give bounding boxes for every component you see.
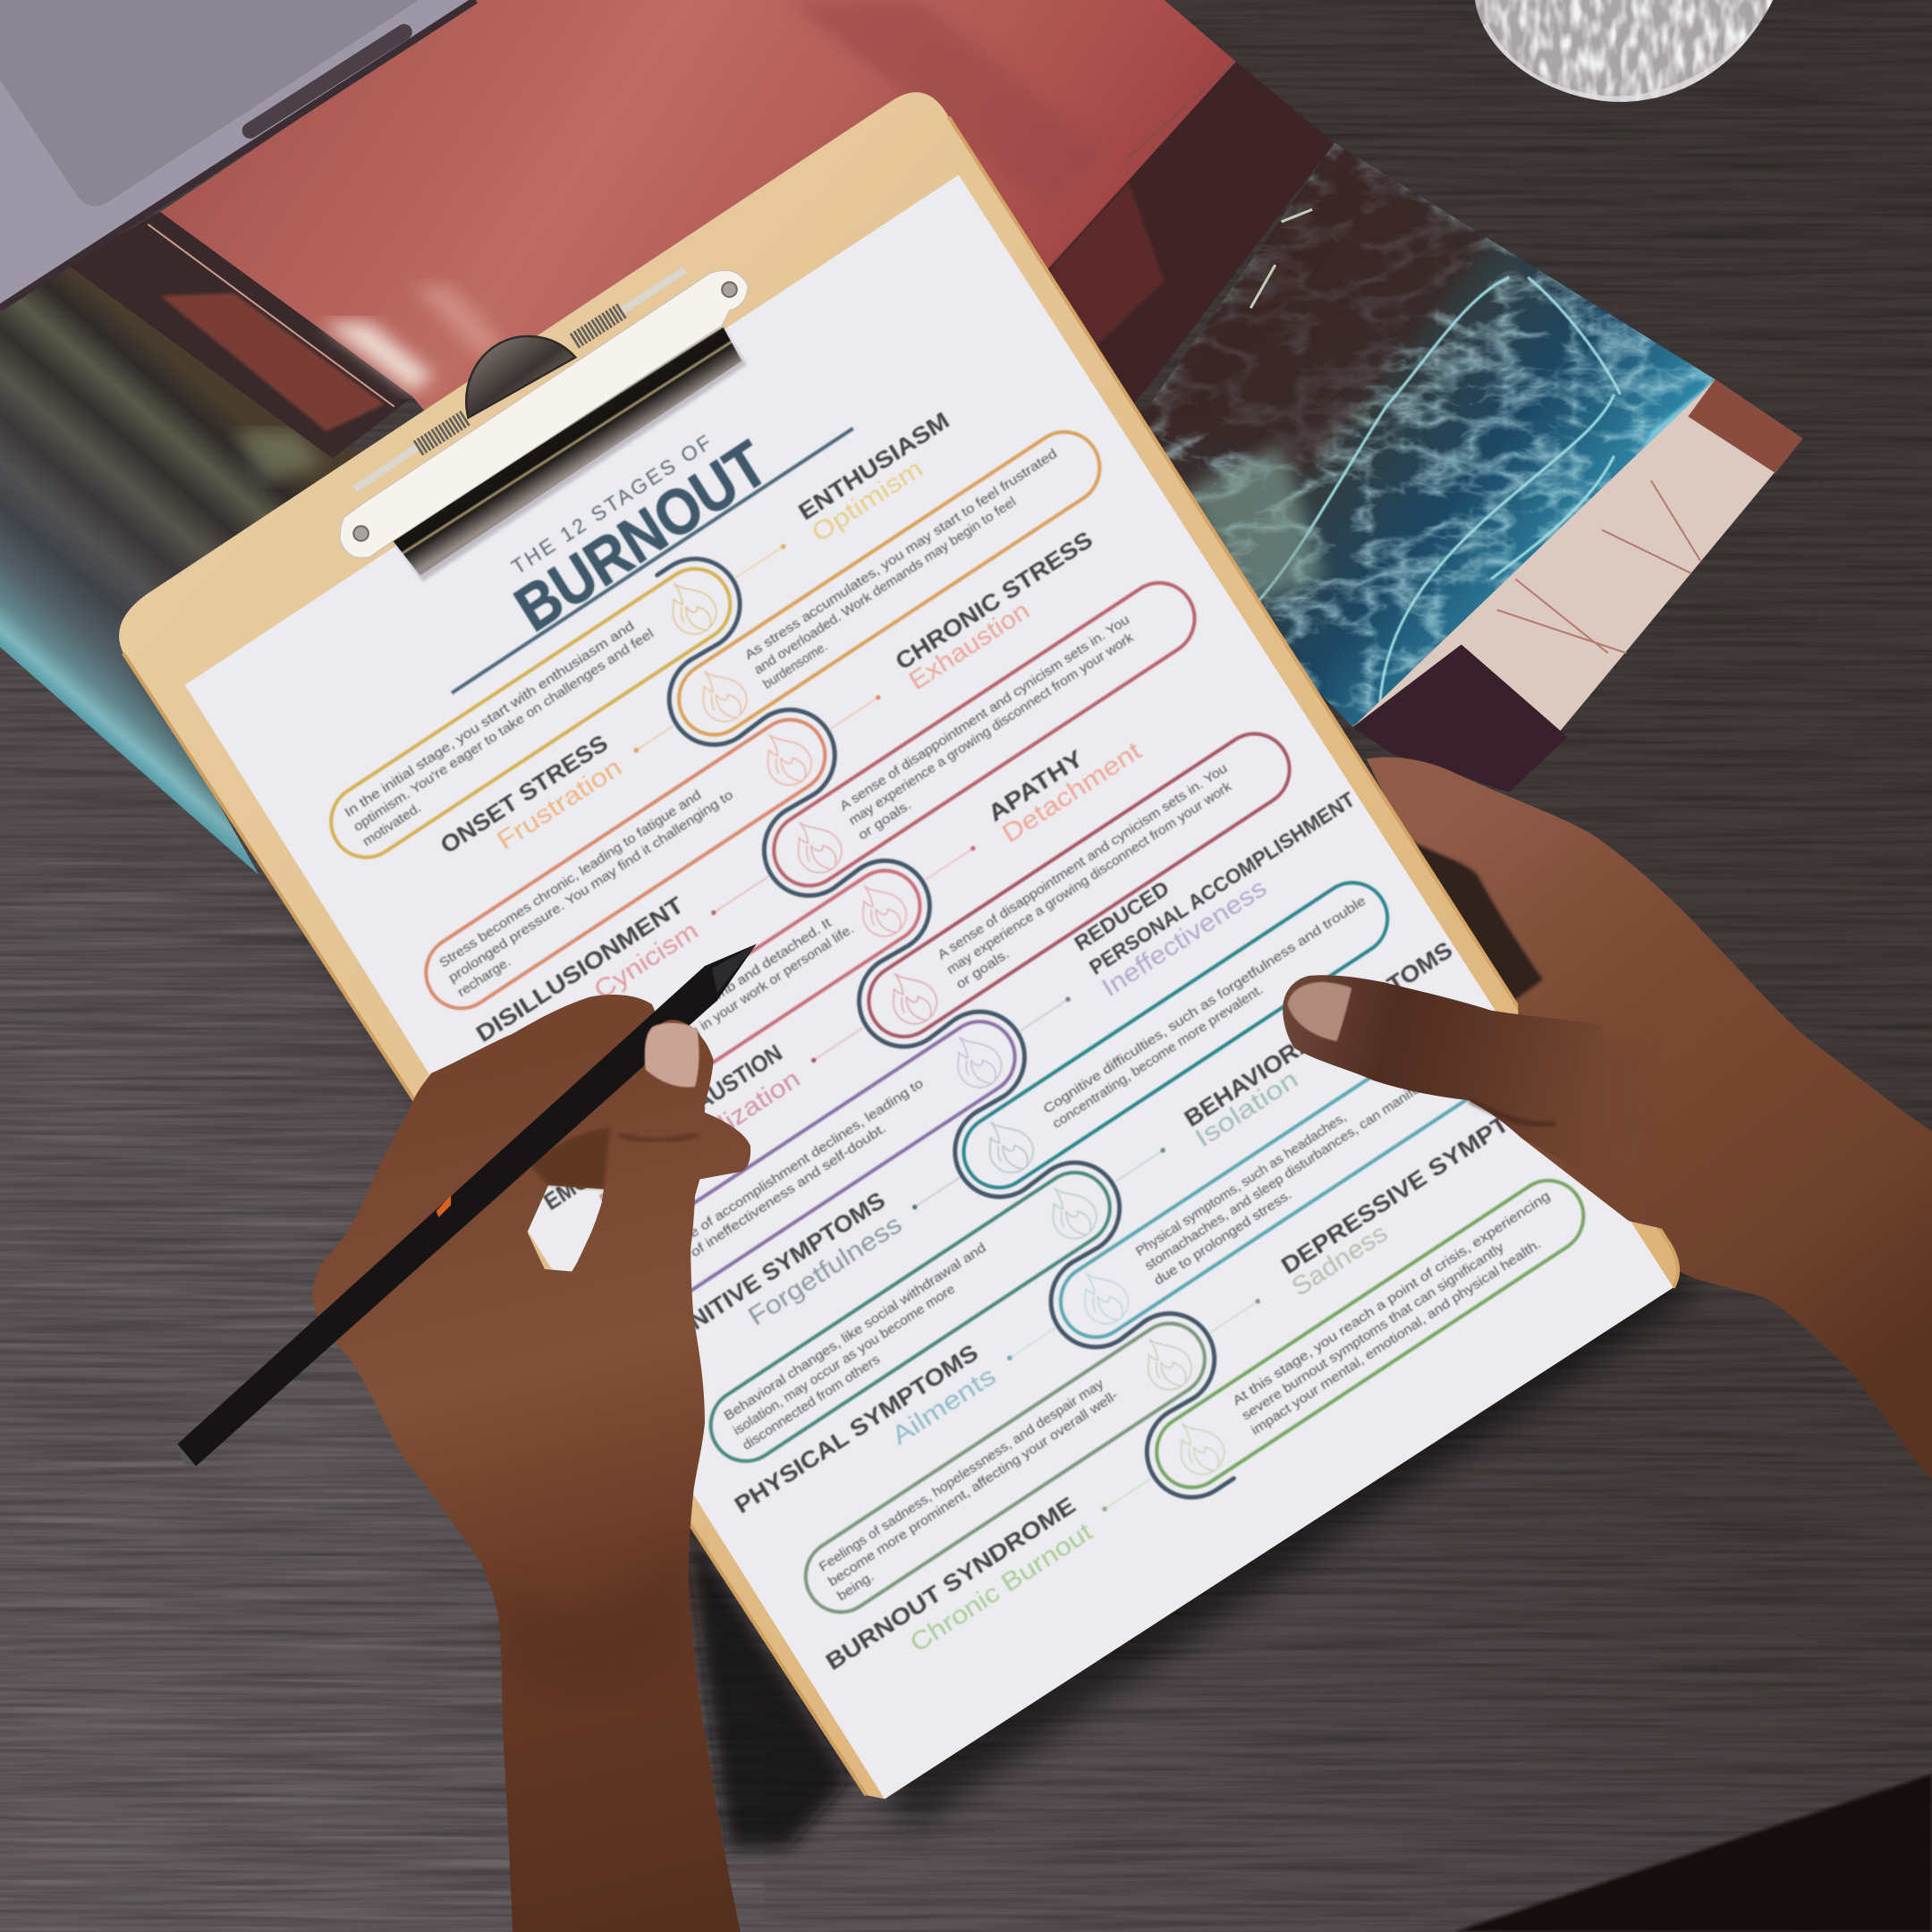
label xyxy=(983,716,1147,850)
flame icon xyxy=(1133,1326,1199,1398)
pill xyxy=(603,1008,1029,1324)
clip chrome lip xyxy=(393,326,741,575)
serpentine connector line xyxy=(605,541,1279,1517)
magazine back sheet xyxy=(1353,379,1802,792)
stage 8 xyxy=(637,866,1401,1407)
pill xyxy=(665,418,1113,749)
stage 6 xyxy=(539,716,1303,1258)
right hand palm over clipboard xyxy=(1518,1004,1750,1282)
description xyxy=(1133,1062,1442,1289)
left hand wrist shading xyxy=(499,1540,690,1694)
label: Frustration xyxy=(492,753,627,856)
description xyxy=(343,612,665,850)
connector xyxy=(1209,1298,1261,1335)
left hand xyxy=(313,995,750,1932)
pencil xyxy=(177,944,757,1466)
flame icon xyxy=(943,1024,1009,1096)
left hand fingers shadow xyxy=(530,1127,610,1189)
description: Cognitive difficulties, such as forgetfulness and trouble xyxy=(1041,894,1368,1117)
connector xyxy=(633,724,674,754)
label xyxy=(891,526,1111,697)
laptop xyxy=(0,0,476,308)
description: or goals. xyxy=(953,947,1012,992)
thumb to palm blend xyxy=(1583,1032,1651,1189)
description: severe burnout symptoms that can significantly xyxy=(1240,1240,1507,1424)
description: concentrating, become more prevalent. xyxy=(1050,983,1266,1131)
description: As stress accumulates, you may start to feel frustrated xyxy=(742,447,1060,663)
description: disconnected from others xyxy=(741,1352,883,1453)
description: Feelings of sadness, hopelessness, and despair may xyxy=(817,1377,1107,1575)
stage 9 xyxy=(698,927,1475,1475)
flame icon xyxy=(753,722,818,793)
description: or goals. xyxy=(856,798,914,843)
stage 7 xyxy=(594,763,1378,1324)
label: Chronic Burnout xyxy=(905,1518,1097,1658)
label: ONSET STRESS xyxy=(436,729,613,859)
flame icon xyxy=(975,1109,1041,1182)
stage 1 xyxy=(318,402,975,871)
paper sheet xyxy=(185,175,1674,1799)
description: being. xyxy=(835,1570,877,1604)
pill xyxy=(760,569,1208,900)
description: due to prolonged stress. xyxy=(1152,1188,1294,1289)
pill xyxy=(318,555,743,871)
connector xyxy=(911,1175,962,1210)
magazine blue marble photo xyxy=(1142,143,1716,726)
clip shadow xyxy=(393,326,747,581)
description: A sense of disappointment and cynicism sets in. You xyxy=(837,613,1132,814)
label: Ailments xyxy=(887,1361,1001,1451)
magazine red page xyxy=(160,0,1236,493)
description xyxy=(936,761,1249,992)
label xyxy=(793,406,968,548)
stage 11 xyxy=(792,1070,1582,1626)
description: Your sense of accomplishment declines, leading to xyxy=(631,1076,926,1278)
description: optimism. You're eager to take on challenges and feel xyxy=(352,627,657,835)
connector xyxy=(829,694,882,731)
label: Depersonalization xyxy=(595,1064,805,1217)
label: REDUCED xyxy=(1070,876,1173,955)
description: Stress becomes chronic, leading to fatigue and xyxy=(437,788,704,971)
clipboard xyxy=(119,92,1678,1799)
description: feelings of ineffectiveness and self-doubt. xyxy=(640,1122,889,1292)
magazine dark beam xyxy=(68,212,412,458)
flame icon xyxy=(688,658,754,730)
infographic on paper xyxy=(243,225,1635,1722)
right hand finger crease xyxy=(1404,838,1543,1004)
flame icon xyxy=(878,961,945,1032)
description xyxy=(1231,1190,1572,1438)
connector xyxy=(734,543,786,580)
left thumb xyxy=(572,1020,714,1331)
connector xyxy=(1101,1477,1151,1513)
description: impact your mental, emotional, and physical health. xyxy=(1249,1237,1544,1438)
clip rivets xyxy=(353,282,737,541)
description: burdensome. xyxy=(761,640,830,692)
label: BEHAVIORAL SYMPTOMS xyxy=(1180,936,1457,1132)
laptop notch xyxy=(250,32,404,131)
label: Cynicism xyxy=(589,916,703,1005)
pill xyxy=(792,1309,1218,1626)
thumb nail xyxy=(645,1023,699,1088)
description: become more prominent, affecting your overall well- xyxy=(826,1388,1121,1589)
label: CHRONIC STRESS xyxy=(891,526,1097,675)
connector xyxy=(1020,996,1072,1033)
description: may be hard to find meaning in your work or personal life. xyxy=(541,922,857,1137)
description: and overloaded. Work demands may begin to feel xyxy=(752,495,1019,678)
title rule xyxy=(452,428,853,693)
description xyxy=(722,1241,1007,1453)
magazine pale highlight xyxy=(323,323,434,392)
label: COGNITIVE SYMPTOMS xyxy=(637,1186,890,1366)
clip dome xyxy=(466,336,575,418)
clip white plate xyxy=(340,270,748,558)
label: PHYSICAL SYMPTOMS xyxy=(730,1339,983,1519)
metal clip xyxy=(340,270,748,581)
clipboard shadow xyxy=(148,123,1694,1830)
pill xyxy=(855,720,1303,1050)
label xyxy=(730,1337,1001,1545)
magazine striped photo xyxy=(0,265,369,875)
stage 4 xyxy=(471,565,1208,1089)
flame icon xyxy=(848,873,914,945)
flame icon xyxy=(657,571,724,642)
description xyxy=(742,447,1079,692)
title kicker: THE 12 STAGES OF xyxy=(507,430,716,579)
label xyxy=(471,891,705,1073)
label: Sadness xyxy=(1287,1218,1393,1302)
label: Forgetfulness xyxy=(743,1209,907,1332)
description xyxy=(631,1076,936,1292)
connector xyxy=(924,845,977,882)
thumb knuckle shading xyxy=(620,1133,698,1141)
right thumb nail xyxy=(1288,982,1352,1041)
pill xyxy=(412,706,838,1022)
label: APATHY xyxy=(983,744,1089,826)
stage 5 xyxy=(507,712,1154,1173)
label: Isolation xyxy=(1191,1065,1303,1154)
label xyxy=(1275,1077,1577,1302)
description: may experience a growing disconnect from your work xyxy=(847,631,1137,828)
label: EMOTIONAL EXHAUSTION xyxy=(539,1038,787,1216)
description: In the initial stage, you start with enthusiasm and xyxy=(343,619,637,820)
label: DEPRESSIVE SYMPTOMS xyxy=(1276,1077,1563,1279)
flame icon xyxy=(1165,1411,1232,1483)
label: BURNOUT SYNDROME xyxy=(821,1491,1080,1675)
connector xyxy=(710,875,769,916)
label: Optimism xyxy=(807,454,928,548)
pill xyxy=(1143,1166,1597,1501)
description: may experience a growing disconnect from your work xyxy=(945,779,1235,978)
description: isolation, may occur as you become more xyxy=(731,1282,958,1438)
clip springs xyxy=(418,310,623,448)
description: stomachaches, and sleep disturbances, can manifest xyxy=(1143,1076,1432,1274)
right thumb lower crease xyxy=(1469,1100,1555,1124)
stage 10 xyxy=(730,1016,1498,1559)
description: Behavioral changes, like social withdrawal and xyxy=(722,1241,989,1424)
label xyxy=(436,729,628,884)
right hand palm behind clipboard xyxy=(1367,757,1932,1479)
stage 2 xyxy=(436,416,1113,899)
magazine striped photo highlight xyxy=(234,431,323,483)
title main: BURNOUT xyxy=(504,428,780,646)
flame icon xyxy=(783,809,849,881)
connector xyxy=(1006,1326,1056,1361)
flame icon xyxy=(1038,1175,1104,1247)
description: recharge. xyxy=(455,955,513,1000)
description xyxy=(817,1374,1130,1604)
description: motivated. xyxy=(360,801,424,850)
connector xyxy=(1114,1147,1166,1183)
title xyxy=(409,360,858,701)
description: prolonged pressure. You may find it challenging to xyxy=(446,788,736,986)
stage 3 xyxy=(412,521,1118,1022)
stage 12 xyxy=(821,1166,1597,1714)
description: A sense of disappointment and cynicism sets in. You xyxy=(936,761,1230,963)
description xyxy=(837,613,1150,843)
magazine dark band on red page xyxy=(789,0,1109,209)
description: Physical symptoms, such as headaches, xyxy=(1133,1110,1349,1259)
clip rods xyxy=(355,270,685,489)
deep shadow beside arm xyxy=(684,1515,851,1848)
label xyxy=(821,1491,1097,1703)
description: You begin to feel emotionally numb and detached. It xyxy=(532,916,834,1123)
pill xyxy=(950,869,1401,1201)
pill xyxy=(698,1158,1123,1475)
label: PERSONAL ACCOMPLISHMENT xyxy=(1085,787,1360,979)
magazine soft highlight xyxy=(412,286,505,357)
right thumb xyxy=(1283,975,1651,1198)
label: Detachment xyxy=(997,736,1147,849)
label: ENTHUSIASM xyxy=(793,406,953,526)
magazine maroon spread xyxy=(1035,62,1335,431)
pill xyxy=(1047,1019,1498,1351)
label: DISILLUSIONMENT xyxy=(471,891,689,1047)
description xyxy=(1041,894,1378,1131)
glass object xyxy=(1475,0,1773,102)
magazine xyxy=(0,0,1802,875)
laptop trackpad xyxy=(0,0,419,207)
pill xyxy=(507,857,934,1173)
description xyxy=(437,774,745,1000)
label: Ineffectiveness xyxy=(1097,873,1272,1003)
label: Exhaustion xyxy=(904,596,1035,696)
flame icon xyxy=(1070,1260,1136,1333)
connector xyxy=(810,1026,864,1063)
description: At this stage, you reach a point of crisis, experiencing xyxy=(1231,1190,1553,1409)
